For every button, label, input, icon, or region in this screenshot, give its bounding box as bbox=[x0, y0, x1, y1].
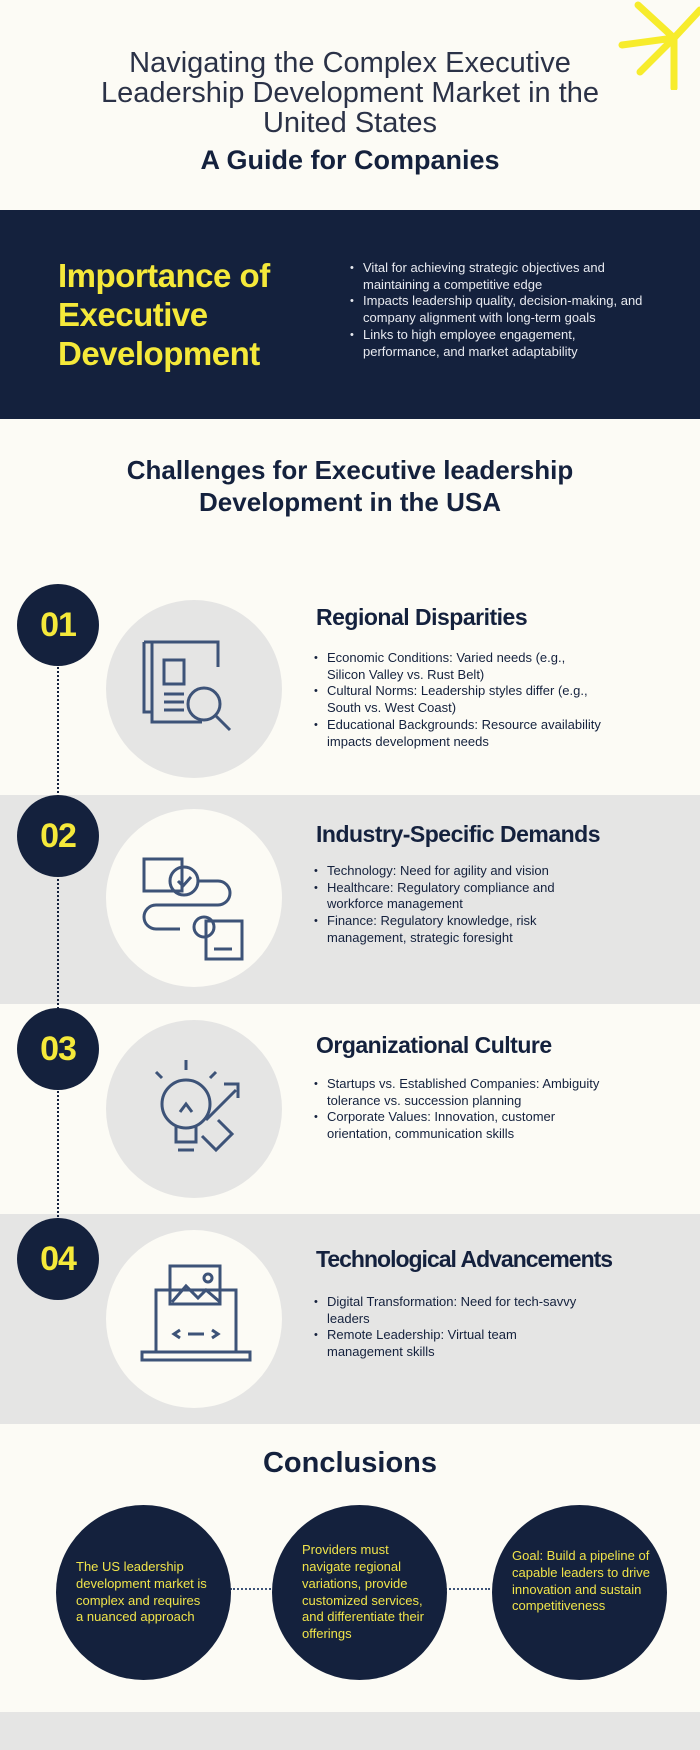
conclusion 2: Providers must navigate regional variations, provide customized services, and differentiate their offerings bbox=[302, 1542, 424, 1641]
bullets 01: Cultural Norms: Leadership styles differ (e.g., South vs. West Coast) bbox=[327, 683, 588, 715]
title: Leadership Development Market in the bbox=[101, 77, 599, 109]
bullets 04: Remote Leadership: Virtual team management skills bbox=[327, 1327, 517, 1359]
bullets 01: Economic Conditions: Varied needs (e.g., Silicon Valley vs. Rust Belt) bbox=[327, 650, 565, 682]
heading 02: Industry-Specific Demands bbox=[316, 821, 600, 847]
number 02 bbox=[17, 795, 99, 877]
heading 03: Organizational Culture bbox=[316, 1032, 552, 1058]
number 04: 04 bbox=[40, 1240, 76, 1278]
number 01 bbox=[17, 584, 99, 666]
number 04 bbox=[17, 1218, 99, 1300]
number 03 bbox=[17, 1008, 99, 1090]
bullets: importance: Vital for achieving strategic objectives and maintaining a competitive edge bbox=[363, 260, 605, 292]
icon: workflow bbox=[106, 809, 282, 987]
conclusion 1 bbox=[56, 1505, 231, 1680]
heading: challenges: Challenges for Executive leadership bbox=[127, 455, 573, 485]
footer band bbox=[0, 1712, 700, 1750]
title: United States bbox=[263, 107, 437, 139]
item 01 bbox=[17, 584, 601, 778]
bullets 03 bbox=[314, 1076, 600, 1141]
bullets 02: Technology: Need for agility and vision bbox=[327, 863, 549, 878]
heading: importance: Executive bbox=[58, 296, 208, 333]
heading 04: Technological Advancements bbox=[316, 1246, 612, 1272]
conclusion 3 bbox=[492, 1505, 667, 1680]
heading: importance: Development bbox=[58, 335, 260, 372]
bullets 01: Educational Backgrounds: Resource availability impacts development needs bbox=[327, 717, 601, 749]
connectors bbox=[230, 1588, 490, 1590]
icon: starburst bbox=[618, 2, 700, 90]
heading: challenges: Development in the USA bbox=[199, 487, 501, 517]
bullets 03: Corporate Values: Innovation, customer orientation, communication skills bbox=[327, 1109, 555, 1141]
number 01: 01 bbox=[40, 606, 76, 644]
title: Navigating the Complex Executive bbox=[129, 47, 571, 79]
icon: laptop bbox=[106, 1230, 282, 1408]
item 04 bbox=[17, 1218, 612, 1408]
number 03: 03 bbox=[40, 1030, 76, 1068]
subtitle: A Guide for Companies bbox=[200, 145, 500, 175]
icon: document search bbox=[106, 600, 282, 778]
bullets 02: Finance: Regulatory knowledge, risk management, strategic foresight bbox=[327, 913, 537, 945]
bullets 04 bbox=[314, 1294, 576, 1359]
icon: lightbulb bbox=[106, 1020, 282, 1198]
bullets 02: Healthcare: Regulatory compliance and workforce management bbox=[327, 880, 555, 911]
bullets 02 bbox=[314, 863, 555, 945]
bullets: importance: Impacts leadership quality, decision-making, and company alignment with long-term goals bbox=[363, 293, 642, 325]
heading: importance bbox=[58, 257, 270, 372]
panel: importance bbox=[0, 210, 700, 419]
title bbox=[101, 47, 599, 139]
bullets: importance bbox=[350, 260, 642, 359]
bullets 04: Digital Transformation: Need for tech-savvy leaders bbox=[327, 1294, 576, 1326]
conclusion 1: The US leadership development market is complex and requires a nuanced approach bbox=[76, 1559, 207, 1624]
bullets: importance: Links to high employee engagement, performance, and market adaptability bbox=[363, 327, 578, 359]
conclusion 3: Goal: Build a pipeline of capable leaders to drive innovation and sustain competitiveness bbox=[512, 1548, 650, 1613]
heading: importance: Importance of bbox=[58, 257, 270, 294]
timeline dotted line bbox=[57, 640, 59, 1240]
heading: challenges bbox=[127, 455, 573, 517]
item 03 bbox=[17, 1008, 600, 1198]
heading: conclusions: Conclusions bbox=[263, 1447, 437, 1479]
conclusion 2 bbox=[272, 1505, 447, 1680]
heading 01: Regional Disparities bbox=[316, 604, 527, 630]
bullets 01 bbox=[314, 650, 601, 749]
band 4 bg bbox=[0, 1214, 700, 1424]
item 02 bbox=[17, 795, 600, 987]
bullets 03: Startups vs. Established Companies: Ambiguity tolerance vs. succession planning bbox=[327, 1076, 599, 1108]
band 2 bg bbox=[0, 795, 700, 1004]
number 02: 02 bbox=[40, 817, 76, 855]
